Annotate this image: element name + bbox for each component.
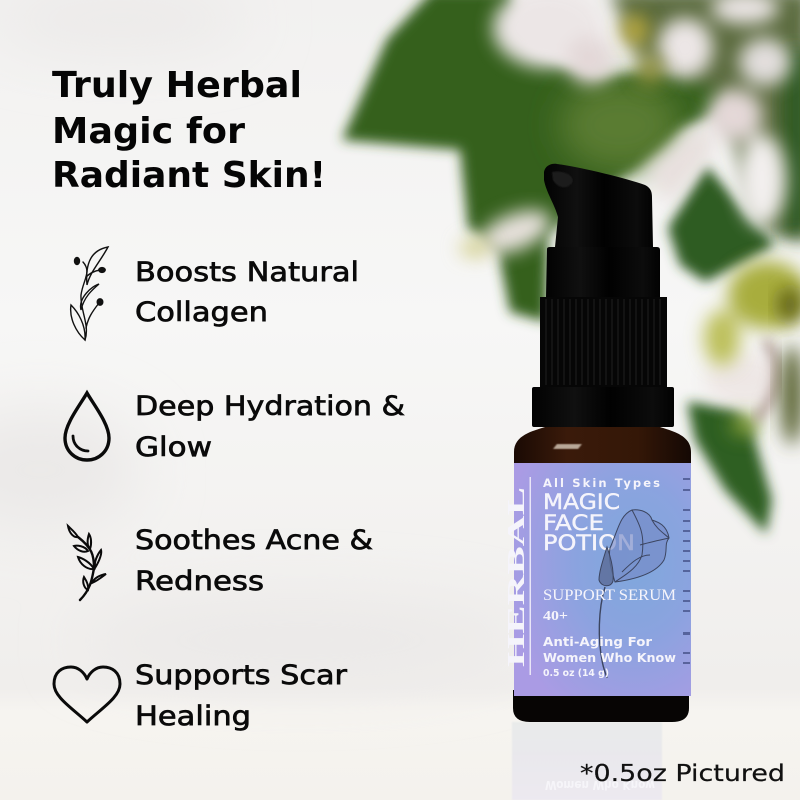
label: product name: MAGIC	[543, 490, 620, 514]
middle right leaf	[668, 165, 775, 282]
table surface reflection of the bottle	[512, 722, 662, 800]
cap base ring	[532, 387, 674, 427]
label: product name	[543, 490, 635, 555]
text: Deep Hydration &	[135, 391, 405, 422]
dark olive core at the far right	[780, 345, 800, 445]
label: cropped side ingredients	[683, 478, 690, 664]
white blossoms	[473, 0, 791, 406]
label	[514, 463, 691, 696]
product bottle	[504, 164, 691, 722]
icon: heart outline	[54, 667, 120, 722]
label: serum name: SUPPORT SERUM	[543, 587, 676, 604]
dark bottle base	[513, 690, 689, 722]
glass highlight	[553, 444, 582, 449]
icon: leafy branch	[68, 526, 106, 600]
pump nozzle	[544, 164, 653, 247]
label: net weight: 0.5 oz (14 g)	[543, 668, 609, 679]
benefit: hydration: Glow	[135, 432, 212, 463]
label: skin types: All Skin Types	[543, 476, 660, 490]
ribbed cap	[540, 297, 667, 387]
title: Radiant Skin!	[52, 155, 326, 196]
text: Supports Scar	[135, 660, 348, 691]
right-edge dark foliage	[782, 50, 800, 235]
title: Truly Herbal	[52, 65, 302, 106]
title	[52, 65, 326, 196]
pink-brown twig	[755, 340, 777, 420]
pump collar	[546, 247, 660, 297]
benefit: scars	[54, 660, 348, 732]
amber glass shoulder	[514, 427, 691, 470]
label: tagline	[543, 634, 676, 665]
yellow-green flower clusters	[460, 14, 800, 436]
label: product name: POTION	[543, 531, 635, 555]
benefit: collagen	[71, 247, 359, 340]
background: blurred green leaves and blossoms	[342, 0, 800, 534]
table surface reflection of the bottle: Women Who Know	[545, 778, 655, 792]
footnote: *0.5oz Pictured	[580, 761, 785, 787]
title: Magic for	[52, 111, 245, 152]
benefit: collagen: Collagen	[135, 297, 268, 328]
label: vertical brand name: HERBAL	[504, 487, 530, 667]
text: Soothes Acne &	[135, 525, 373, 556]
label: age: 40+	[543, 609, 568, 624]
olive blossom background	[610, 0, 800, 240]
benefit: acne	[68, 525, 373, 600]
large leaf behind the pump	[342, 0, 740, 322]
label: tagline: Women Who Know	[543, 650, 676, 665]
cap ribs	[546, 299, 660, 385]
background: soft grey mottling	[0, 0, 520, 680]
label: tagline: Anti-Aging For	[543, 634, 653, 649]
benefit: hydration	[65, 391, 405, 463]
icon: water drop	[65, 393, 109, 460]
lower right leaf	[687, 402, 772, 534]
icon: botanical sprig	[71, 247, 108, 340]
text: Boosts Natural	[135, 257, 359, 288]
benefit: scars: Healing	[135, 701, 251, 732]
label: flower drawing	[599, 510, 669, 678]
label: product name: FACE	[543, 511, 604, 535]
nozzle highlight	[552, 172, 573, 187]
benefit: acne: Redness	[135, 566, 264, 597]
lighter leaf mottling	[560, 80, 680, 170]
label: vertical rule	[530, 477, 531, 675]
